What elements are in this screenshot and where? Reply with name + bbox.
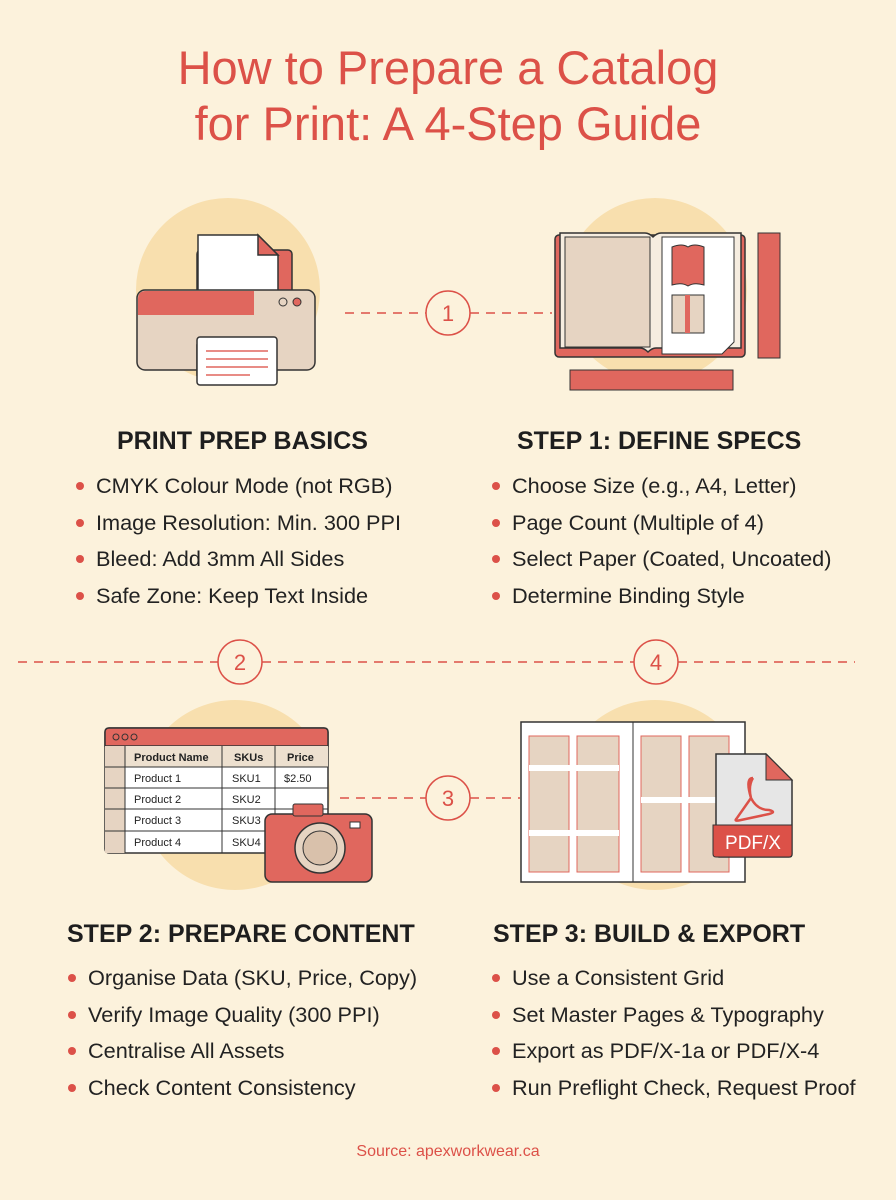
icon: spreadsheet and camera: Product 1 <box>134 773 181 785</box>
icon: spreadsheet and camera: Product 3 <box>134 815 181 827</box>
icon: spreadsheet and camera: Product 4 <box>134 837 181 849</box>
list: basics: Image Resolution: Min. 300 PPI <box>96 510 401 534</box>
list: basics: CMYK Colour Mode (not RGB) <box>96 473 392 498</box>
icon: spreadsheet and camera: SKU3 <box>232 815 261 827</box>
connectors and step numbers: 4 <box>650 650 662 675</box>
heading: step 1: STEP 1: DEFINE SPECS <box>517 427 801 455</box>
icon: spreadsheet and camera: Product 2 <box>134 794 181 806</box>
title <box>178 41 718 150</box>
list: basics: Bleed: Add 3mm All Sides <box>96 546 344 571</box>
icon: book with rulers <box>554 198 780 390</box>
icon: grid layout and PDF/X <box>520 700 794 890</box>
list: step 3 <box>492 965 856 1100</box>
icon: grid layout and PDF/X: PDF/X <box>725 833 781 854</box>
icon: spreadsheet and camera: Price <box>287 752 314 764</box>
icon: spreadsheet and camera: Product Name <box>134 752 209 764</box>
list: step 3: Export as PDF/X-1a or PDF/X-4 <box>512 1038 819 1063</box>
list: step 3: Run Preflight Check, Request Proof <box>512 1074 856 1100</box>
icon: spreadsheet and camera <box>104 700 373 890</box>
list: step 3: Use a Consistent Grid <box>512 965 724 990</box>
list: step 1: Determine Binding Style <box>512 582 745 608</box>
heading: step 3: STEP 3: BUILD & EXPORT <box>493 920 805 948</box>
list: step 1 <box>492 473 831 608</box>
list: step 3: Set Master Pages & Typography <box>512 1002 824 1026</box>
icon: spreadsheet and camera: $2.50 <box>284 773 312 785</box>
list: step 2: Verify Image Quality (300 PPI) <box>88 1002 380 1026</box>
list: step 1: Select Paper (Coated, Uncoated) <box>512 546 831 571</box>
heading: print prep basics: PRINT PREP BASICS <box>117 427 368 455</box>
icon: spreadsheet and camera: SKU1 <box>232 773 261 785</box>
icon: spreadsheet and camera: SKUs <box>234 752 263 764</box>
title: How to Prepare a Catalog <box>178 41 718 94</box>
heading: step 2: STEP 2: PREPARE CONTENT <box>67 920 415 948</box>
icon: spreadsheet and camera: SKU4 <box>232 837 261 849</box>
list: step 1: Choose Size (e.g., A4, Letter) <box>512 473 796 498</box>
list: step 2: Check Content Consistency <box>88 1074 356 1100</box>
title: for Print: A 4-Step Guide <box>195 97 701 150</box>
connectors and step numbers: 3 <box>442 786 454 811</box>
list: basics: Safe Zone: Keep Text Inside <box>96 582 368 608</box>
icon: spreadsheet and camera: SKU2 <box>232 794 261 806</box>
icon: printer <box>136 198 320 386</box>
source: Source: apexworkwear.ca <box>356 1143 540 1160</box>
list: basics <box>76 473 401 608</box>
list: step 2: Centralise All Assets <box>88 1038 284 1063</box>
list: step 2: Organise Data (SKU, Price, Copy) <box>88 965 417 990</box>
connectors and step numbers: 1 <box>442 301 454 326</box>
list: step 2 <box>68 965 417 1100</box>
connectors and step numbers: 2 <box>234 650 246 675</box>
list: step 1: Page Count (Multiple of 4) <box>512 510 764 534</box>
